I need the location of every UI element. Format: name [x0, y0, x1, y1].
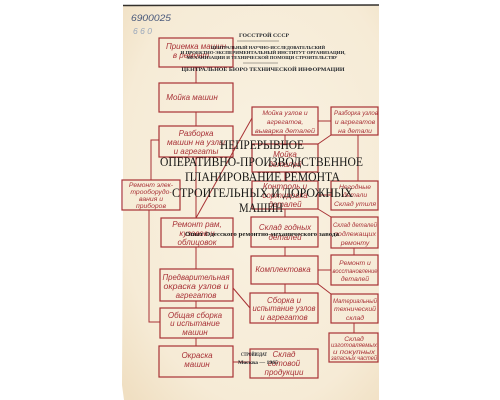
box: Ремонт электрооборудования: приборов: [136, 202, 166, 210]
box: Склад изготовляемых частей: запасных частей: [330, 354, 377, 362]
box: Мойка деталей: деталей: [268, 160, 302, 169]
box: Мойка деталей: [252, 144, 318, 172]
box: Контроль: деталей: [268, 200, 302, 209]
title: МАШИН: [239, 200, 283, 215]
box: Контроль: сортировка: [262, 191, 308, 200]
box: Сборка и испытание: и агрегатов: [260, 313, 308, 322]
handwritten archive number: [131, 13, 172, 36]
box: Ремонт и восстановление деталей: деталей: [341, 275, 369, 283]
box: Склад изготовляемых частей: [329, 333, 378, 362]
publisher header: ЦЕНТРАЛЬНОЕ БЮРО ТЕХНИЧЕСКОЙ ИНФОРМАЦИИ: [182, 65, 345, 73]
box: Ремонт и восстановление деталей: [331, 255, 378, 285]
box: Контроль: [252, 181, 318, 209]
box: Предварительная окраска: [160, 269, 233, 301]
box: Склад изготовляемых частей: изготовляемых: [331, 342, 378, 349]
imprint: Москва — 1965: [238, 360, 278, 366]
box: Приемка: в ремонт: [173, 51, 209, 60]
box: Мойка узлов: агрегатов,: [267, 119, 303, 126]
box: Предварительная окраска: окраска узлов и: [164, 282, 229, 291]
title: СТРОИТЕЛЬНЫХ И ДОРОЖНЫХ: [172, 185, 354, 200]
box: Предварительная окраска: агрегатов: [176, 291, 216, 300]
box: Разборка узлов: Разборка узлов: [334, 109, 378, 117]
box: Материальный склад: Материальный: [333, 297, 377, 305]
box: Мойка узлов: [252, 107, 318, 135]
box: Негодные детали: [331, 181, 378, 210]
box: Окраска машин: [159, 346, 233, 377]
box: Склад изготовляемых частей: Склад: [344, 335, 364, 343]
box: Склад деталей подлежащих ремонту: Склад деталей: [333, 221, 377, 229]
box: Общая сборка: машин: [182, 328, 208, 337]
box: Негодные детали: Негодные: [339, 183, 371, 191]
box: Разборка машин: Разборка: [179, 129, 214, 138]
box: Приемка: Приемка машин: [166, 42, 227, 51]
box: Ремонт рам: кузовов и: [179, 229, 215, 238]
title: ОПЕРАТИВНО-ПРОИЗВОДСТВЕННОЕ: [160, 154, 363, 169]
box: Контроль: Контроль и: [263, 182, 308, 191]
box: Мойка машин: Мойка машин: [166, 93, 218, 102]
paper sheet: [122, 5, 379, 400]
publisher header: ЦЕНТРАЛЬНЫЙ НАУЧНО-ИССЛЕДОВАТЕЛЬСКИЙ: [211, 45, 325, 50]
box: Разборка узлов: [331, 107, 378, 135]
box: Склад деталей подлежащих ремонту: ремонту: [340, 240, 370, 247]
box: Ремонт электрооборудования: трооборудо-: [130, 188, 172, 196]
box: Разборка машин: машин на узлы: [167, 138, 225, 147]
box: Склад деталей подлежащих ремонту: [331, 217, 378, 248]
box: Комплектовка: [251, 256, 318, 284]
box: Окраска машин: Окраска: [181, 351, 213, 360]
box: Материальный склад: [331, 294, 378, 323]
box: Мойка узлов: Мойка узлов и: [262, 109, 308, 117]
title: НЕПРЕРЫВНОЕ: [220, 137, 304, 152]
box: Общая сборка: [160, 308, 233, 338]
box: Склад годных деталей: деталей: [268, 233, 302, 242]
box: Мойка узлов: выварка деталей: [255, 127, 315, 135]
box: Ремонт электрооборудования: вания и: [139, 196, 163, 203]
box: Склад готовой продукции: продукции: [265, 368, 304, 377]
box: Негодные детали: Склад утиля: [334, 200, 376, 208]
box: Мойка машин: [159, 83, 233, 112]
subtitle: Опыт Одесского ремонтно-механического завода: [185, 232, 339, 238]
box: Склад готовой продукции: готовой: [268, 359, 301, 368]
title: ПЛАНИРОВАНИЕ РЕМОНТА: [185, 169, 341, 184]
box: Ремонт электрооборудования: Ремонт элек-: [129, 182, 174, 189]
publisher header: ГОССТРОЙ СССР: [239, 31, 290, 39]
box: Склад годных деталей: [251, 217, 318, 247]
box: Склад готовой продукции: [250, 349, 318, 378]
box: Сборка и испытание: испытание узлов: [252, 304, 316, 313]
box: Материальный склад: склад: [346, 314, 364, 322]
box: Предварительная окраска: Предварительная: [162, 273, 230, 282]
box: Склад деталей подлежащих ремонту: подлежащих: [334, 230, 377, 238]
imprint: СТРОЙИЗДАТ: [241, 352, 268, 358]
box: Ремонт электрооборудования: [122, 180, 180, 210]
box: Разборка узлов: и агрегатов: [335, 119, 376, 126]
flowchart connectors: [149, 67, 358, 362]
box: Разборка машин: и агрегаты: [174, 147, 219, 156]
box: Склад изготовляемых частей: и покупных: [333, 349, 376, 356]
title: [160, 137, 363, 215]
box: Ремонт и восстановление деталей: Ремонт и: [339, 260, 371, 267]
imprint: [238, 352, 278, 366]
box: Сборка и испытание: [250, 293, 318, 323]
box: Комплектовка: Комплектовка: [255, 265, 311, 274]
box: Общая сборка: Общая сборка: [168, 311, 223, 320]
publisher header: И ПРОЕКТНО-ЭКСПЕРИМЕНТАЛЬНЫЙ ИНСТИТУТ ОРГАНИЗАЦИИ,: [180, 50, 346, 55]
box: Ремонт рам: облицовок: [178, 238, 218, 247]
box: Разборка машин: [159, 126, 233, 157]
box: Общая сборка: и испытание: [170, 319, 220, 328]
box: Приемка: [159, 38, 233, 67]
handwritten archive number: 6900025: [131, 13, 172, 23]
box: Ремонт и восстановление деталей: восстановление: [332, 268, 378, 275]
box: Негодные детали: детали: [343, 191, 367, 199]
publisher header: МЕХАНИЗАЦИИ И ТЕХНИЧЕСКОЙ ПОМОЩИ СТРОИТЕЛЬСТВУ: [186, 55, 338, 60]
publisher header: [180, 31, 346, 73]
box: Ремонт рам: Ремонт рам,: [172, 220, 222, 229]
handwritten archive number: 660: [133, 26, 152, 36]
box: Ремонт рам: [161, 218, 233, 247]
box: Разборка узлов: на детали: [338, 127, 372, 135]
box: Материальный склад: технический: [334, 305, 376, 313]
box: Мойка деталей: Мойка: [273, 150, 297, 159]
box: Окраска машин: машин: [184, 360, 210, 369]
box: Склад готовой продукции: Склад: [273, 350, 296, 359]
box: Сборка и испытание: Сборка и: [267, 296, 302, 305]
box: Склад годных деталей: Склад годных: [259, 223, 312, 232]
